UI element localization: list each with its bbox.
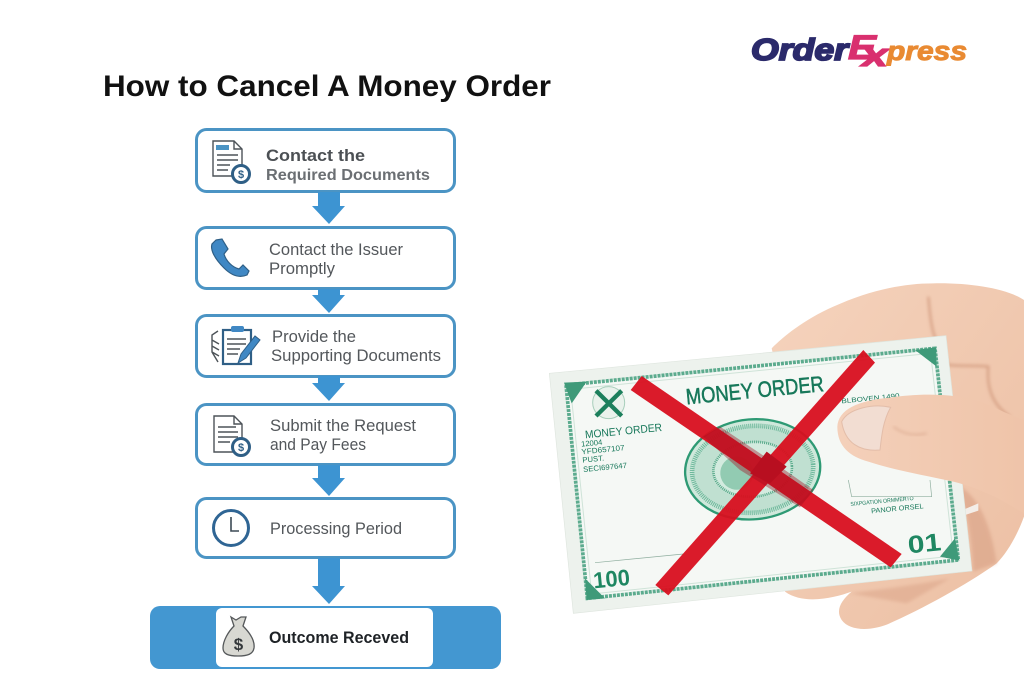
money order note — [549, 336, 972, 613]
step 2: Contact the Issuer Promptly: Promptly — [269, 260, 336, 278]
icon: document with dollar coin: $ — [238, 442, 244, 454]
note details: SIXPGATION ORMMERTO — [850, 496, 914, 508]
icon: money bag — [223, 617, 254, 656]
step 4: Submit the Request and Pay Fees: Submit the Request — [270, 417, 416, 435]
logo: OrderExpress: E — [848, 29, 878, 67]
arrow 1 — [312, 192, 345, 224]
icon: money bag: $ — [234, 635, 244, 654]
step 5: Processing Period: Processing Period — [270, 520, 402, 538]
step 3: Provide the Supporting Documents — [196, 316, 454, 376]
final step: Outcome Received — [150, 606, 501, 669]
red cross — [631, 350, 902, 595]
icon: clipboard with pen — [212, 326, 260, 364]
thumbnail — [842, 406, 891, 450]
note details — [581, 393, 924, 515]
icon: document with dollar coin — [213, 141, 250, 182]
note details: MONEY ORDER — [584, 422, 663, 441]
note details: PANOR ORSEL — [871, 503, 924, 515]
step 5: Processing Period — [196, 498, 454, 558]
logo: OrderExpress: press — [886, 36, 967, 66]
photo: hand holding money order crossed out — [549, 283, 1024, 629]
logo: OrderExpress: x — [859, 37, 890, 73]
note details: BLBOVEN 1490 — [841, 393, 900, 405]
arrow 3 — [312, 376, 345, 401]
corner ornaments — [564, 347, 959, 600]
logo: OrderExpress — [751, 29, 967, 73]
icon: clock — [214, 510, 248, 546]
step 1: Contact the Required Documents: Required Documents — [266, 167, 430, 184]
arrow 4 — [312, 465, 345, 496]
note details: PUST. — [582, 454, 604, 465]
finger creases — [928, 297, 1010, 417]
guilloche seal — [681, 414, 824, 525]
shadow under the thumb — [953, 483, 997, 572]
note numerals: 100 — [592, 564, 631, 593]
note details: SECI697647 — [583, 461, 627, 474]
step 3: Provide the Supporting Documents: Provide the — [272, 328, 356, 346]
step 3: Provide the Supporting Documents: Supporting Documents — [271, 347, 441, 365]
note details: YFD657107 — [581, 443, 625, 456]
icon: document with dollar coin: $ — [238, 169, 244, 181]
step 1: Contact the Required Documents: Contact the — [266, 146, 365, 165]
icon: phone — [212, 239, 249, 276]
hand behind the note — [772, 283, 1024, 629]
note heading: MONEY ORDER — [685, 371, 825, 409]
logo: OrderExpress: Order — [751, 32, 850, 67]
money order note: 01 — [907, 529, 943, 559]
title: How to Cancel A Money Order — [103, 70, 552, 103]
step 4: Submit the Request and Pay Fees — [196, 404, 454, 464]
step 2: Contact the Issuer Promptly: Contact the Issuer — [269, 241, 404, 259]
thumb — [837, 395, 1024, 513]
arrow 5 — [312, 558, 345, 604]
step 4: Submit the Request and Pay Fees: and Pay Fees — [270, 436, 366, 454]
ring — [963, 503, 978, 515]
step 2: Contact the Issuer Promptly — [196, 228, 454, 288]
final step: Outcome Received: Outcome Receved — [269, 628, 409, 647]
step 1: Contact the Required Documents — [196, 130, 454, 192]
icon: document with dollar coin — [214, 416, 250, 456]
crest — [593, 387, 625, 419]
note details: 12004 — [581, 438, 603, 449]
arrow 2 — [312, 289, 345, 313]
